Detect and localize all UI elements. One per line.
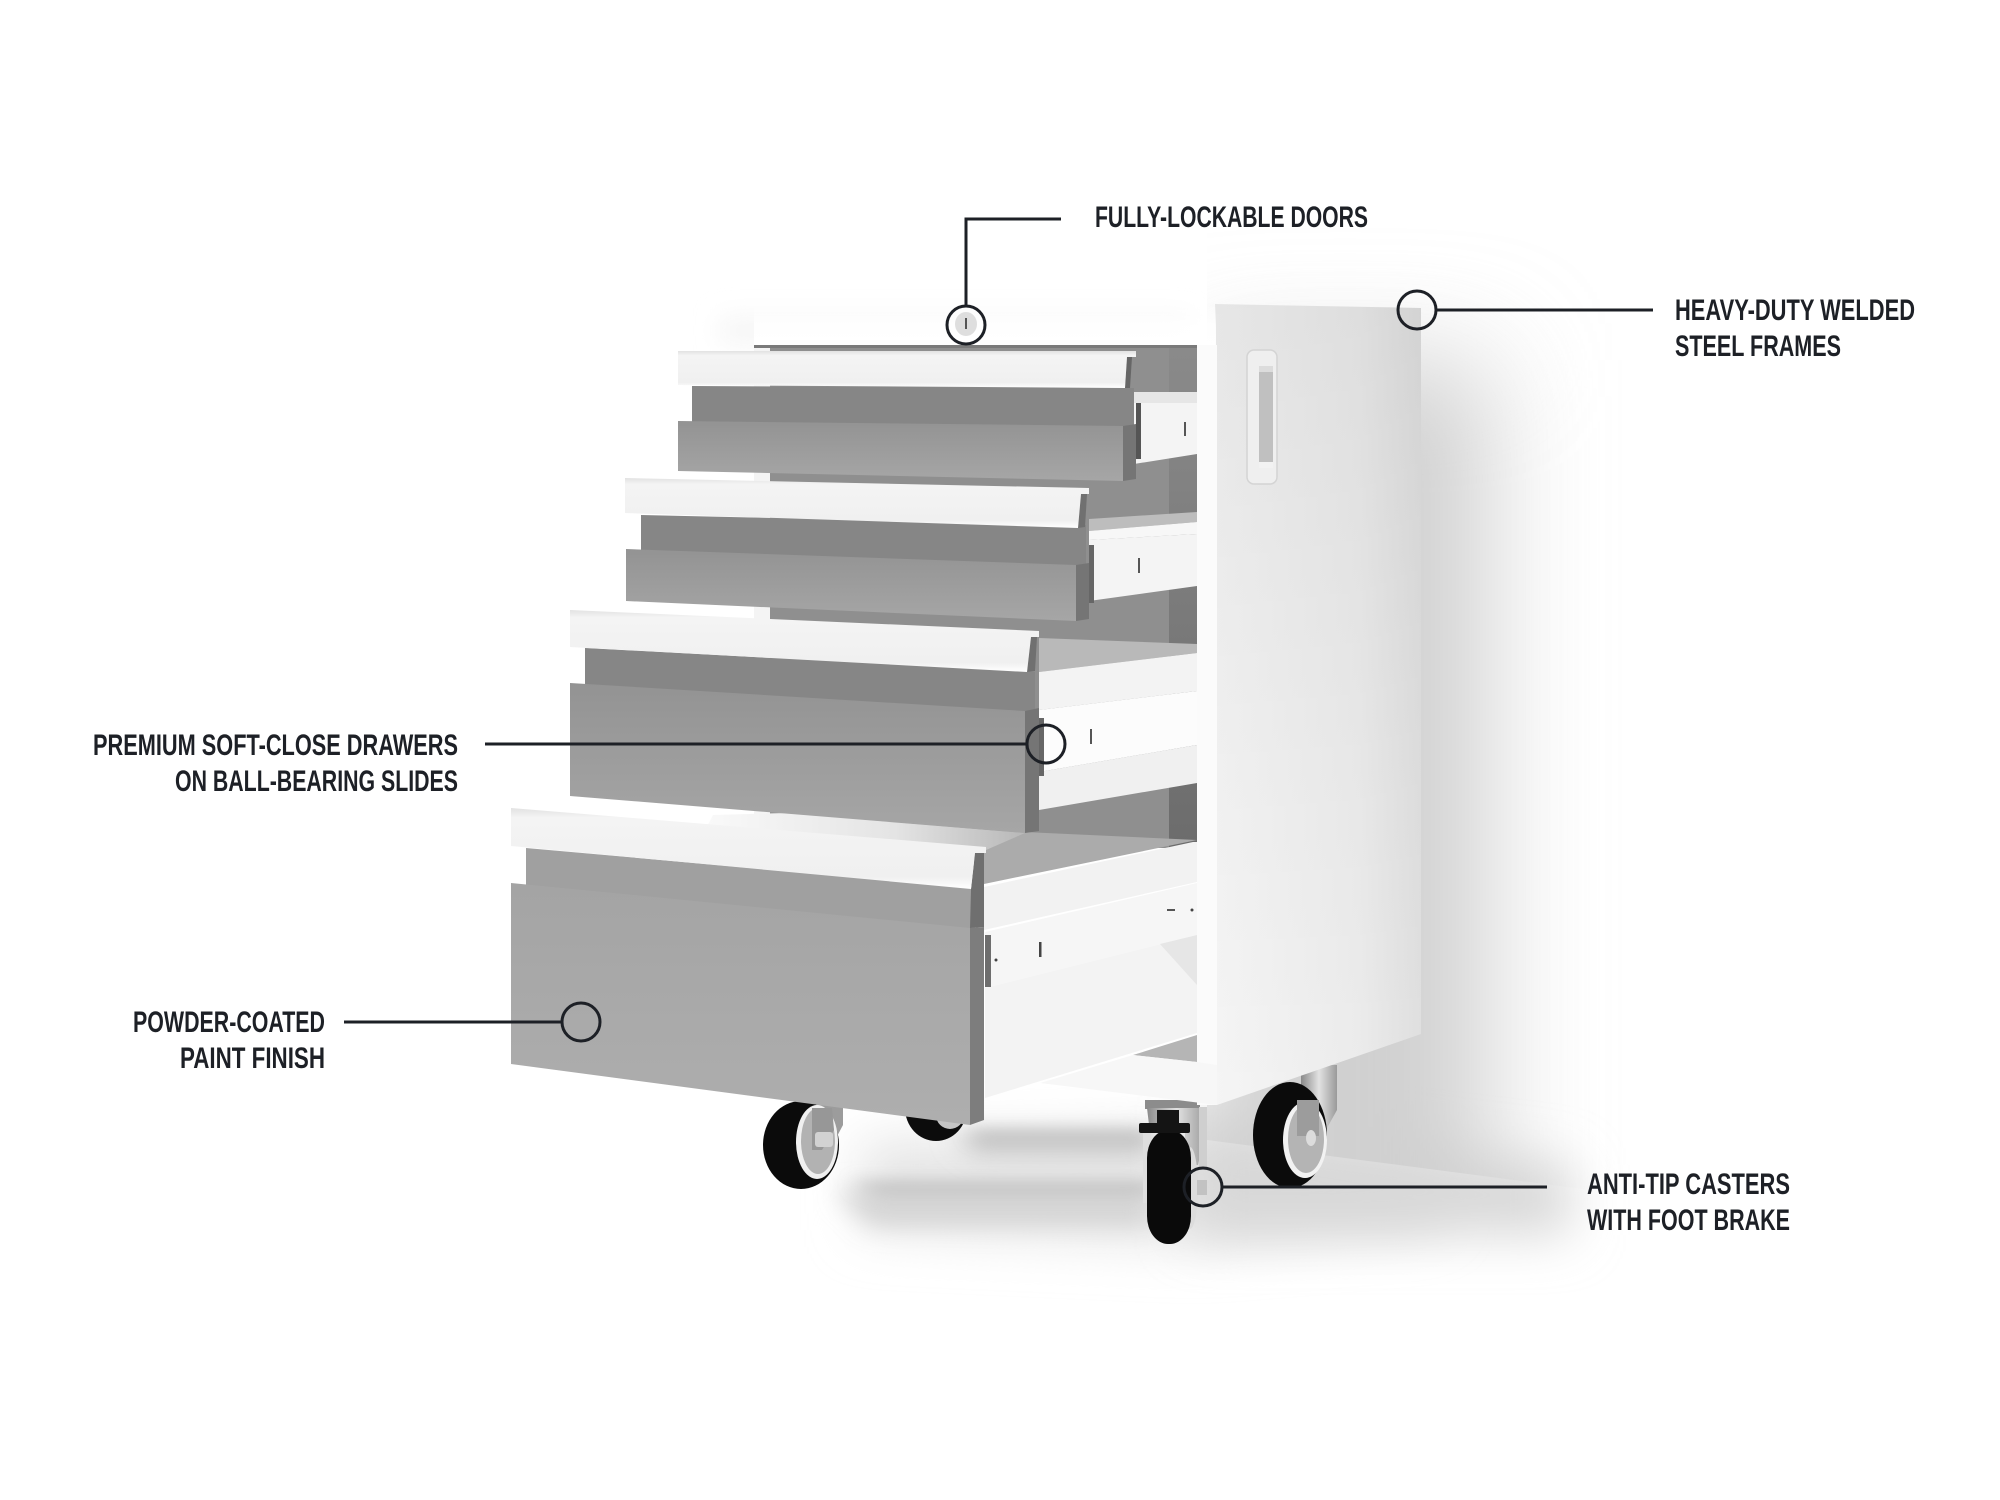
recess: [641, 515, 1086, 567]
handle: [511, 808, 986, 889]
callout: soft-close drawers: PREMIUM SOFT-CLOSE DRAWERS: [93, 729, 458, 762]
top plate: [754, 304, 1216, 348]
callout: powder-coated paint finish: PAINT FINISH: [180, 1042, 325, 1075]
callout: fully-lockable doors: FULLY-LOCKABLE DOORS: [1095, 201, 1368, 234]
face: [570, 683, 1039, 833]
drawer side: [984, 842, 1197, 1098]
callout: soft-close drawers: ON BALL-BEARING SLIDES: [175, 765, 458, 798]
caster: front right with foot brake: [1139, 1100, 1207, 1244]
callout: heavy-duty welded steel frames: [1398, 291, 1915, 363]
floor and wall shadows: [720, 316, 1570, 1320]
handle: [570, 610, 1039, 672]
callout: fully-lockable doors: [947, 201, 1368, 344]
face: [678, 421, 1136, 481]
recess: [692, 386, 1134, 428]
recess: [526, 848, 975, 931]
drawer interior and side: [1089, 512, 1197, 603]
callout: heavy-duty welded steel frames: STEEL FRAMES: [1675, 330, 1841, 363]
callout: anti-tip casters: [1184, 1168, 1790, 1237]
handle: [678, 351, 1136, 388]
casters: [763, 1065, 1337, 1244]
cabinet body: [754, 304, 1421, 1105]
callout: soft-close drawers: [93, 725, 1065, 798]
handle: [625, 478, 1089, 528]
callout: heavy-duty welded steel frames: HEAVY-DUTY WELDED: [1675, 294, 1915, 327]
slide side: [1134, 392, 1197, 464]
infographic: [94, 206, 1914, 1265]
callout: anti-tip casters: WITH FOOT BRAKE: [1587, 1204, 1790, 1237]
bottom plate: [1040, 1035, 1217, 1105]
drawer 2: [625, 478, 1197, 621]
caster: rear left: [905, 1075, 967, 1141]
front frame strip: [1197, 345, 1217, 1105]
side panel: [1215, 304, 1421, 1105]
drawer 1: [678, 351, 1197, 481]
interior: [754, 345, 1197, 848]
face: [626, 549, 1089, 621]
recess: [585, 648, 1035, 712]
drawer 3: [570, 610, 1197, 884]
foot brake: [1139, 1110, 1190, 1133]
drawer 4: [511, 808, 1217, 1125]
side handle: [1247, 350, 1277, 484]
drawer interior and side: [1039, 638, 1197, 810]
callout: powder-coated paint finish: [133, 1003, 600, 1075]
caster: rear right: [1253, 1065, 1337, 1188]
caster: front left: [763, 1100, 843, 1189]
lower drawer floor: [700, 813, 1197, 884]
callout: anti-tip casters: ANTI-TIP CASTERS: [1587, 1168, 1790, 1201]
lock: [955, 312, 977, 336]
face: [511, 853, 984, 1125]
callout: powder-coated paint finish: POWDER-COATED: [133, 1006, 325, 1039]
